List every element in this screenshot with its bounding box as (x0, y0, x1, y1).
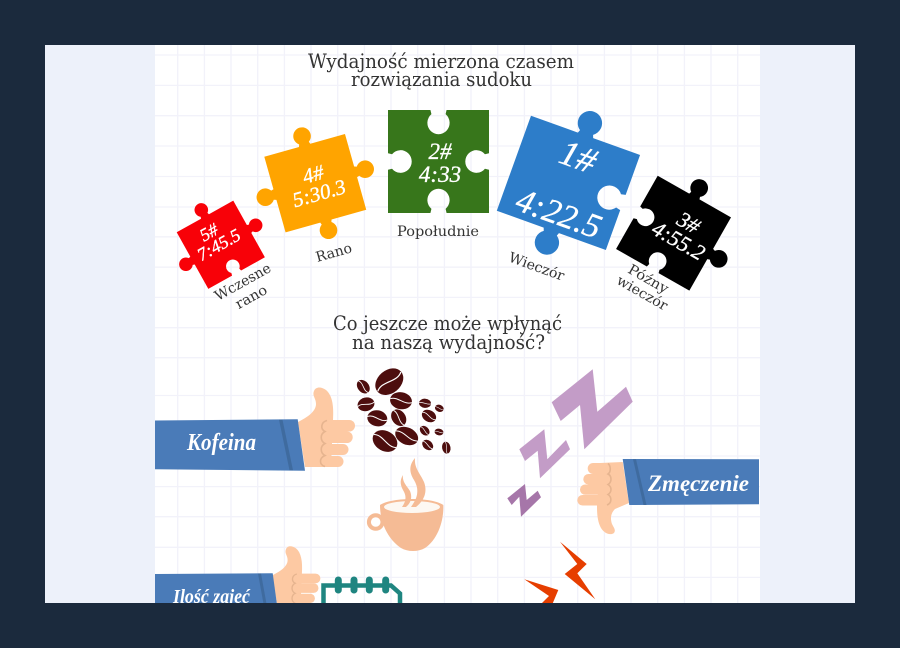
title: sudoku performance: Wydajność mierzona czasem (308, 49, 574, 73)
puzzle piece: green, afternoon: 4:33 (419, 162, 461, 187)
icon: sleeping Z letters (507, 369, 633, 517)
icon: coffee beans (354, 363, 451, 456)
puzzle piece: green, afternoon (388, 110, 489, 213)
puzzle piece: orange, morning: 4# (300, 160, 327, 189)
puzzle piece: orange, morning: 5:30.3 (290, 174, 348, 212)
label: early morning: Wczesne (212, 260, 274, 305)
heading: what else affects performance: Co jeszcze może wpłynąć (333, 311, 562, 335)
thumbs down hand: fatigue (577, 462, 629, 534)
label: morning: Rano (314, 240, 354, 266)
puzzle piece: red, early morning: 7:45.5 (194, 225, 244, 265)
puzzle piece: blue, evening (488, 92, 649, 274)
puzzle piece: blue, evening: 4:22.5 (511, 182, 606, 246)
heading: what else affects performance (333, 311, 562, 354)
sleeve banner: caffeine: Kofeina (186, 430, 256, 456)
icon: calendar (324, 580, 400, 610)
puzzle piece: red, early morning (157, 181, 277, 296)
puzzle piece: blue, evening: 1# (554, 132, 603, 182)
thumbs up hand: caffeine (298, 388, 355, 467)
puzzle piece: black, late evening: 4:55.2 (648, 216, 710, 265)
puzzle piece: black, late evening: 3# (672, 206, 705, 239)
sleeve banner: fatigue (623, 459, 759, 505)
sleeve banner: amount of classes (155, 573, 278, 612)
title: sudoku performance: rozwiązania sudoku (351, 67, 532, 91)
sleeve banner: fatigue: Zmęczenie (647, 471, 749, 496)
title: sudoku performance (308, 49, 574, 91)
puzzle piece: red, early morning: 5# (196, 219, 222, 245)
icon: lightning bolts (524, 542, 595, 620)
sleeve banner: amount of classes: Ilość zajęć (172, 586, 251, 608)
label: late evening: Późny (625, 262, 671, 297)
label: evening: Wieczór (506, 250, 567, 285)
label: afternoon: Popołudnie (397, 224, 479, 240)
label: early morning: rano (233, 282, 270, 313)
puzzle piece: black, late evening (616, 159, 756, 300)
puzzle piece: green, afternoon: 2# (428, 139, 452, 164)
heading: what else affects performance: na naszą wydajność? (352, 330, 545, 354)
thumbs up hand: amount of classes (272, 546, 320, 613)
icon: coffee cup (369, 458, 443, 551)
sleeve banner: caffeine (155, 419, 305, 471)
label: late evening: wieczór (614, 273, 671, 314)
puzzle piece: orange, morning (241, 111, 389, 255)
